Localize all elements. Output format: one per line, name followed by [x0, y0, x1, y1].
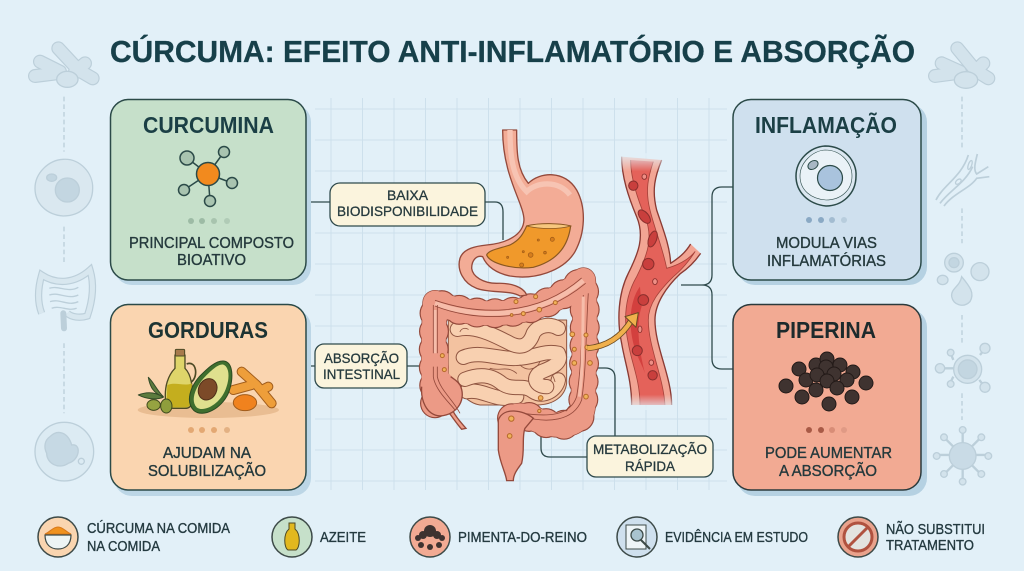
connector lines: [306, 187, 733, 457]
legend: não substitui tratamento: NÃO SUBSTITUI: [886, 521, 985, 538]
description: curcumina: PRINCIPAL COMPOSTO: [129, 235, 294, 252]
legend: cúrcuma na comida: CÚRCUMA NA COMIDA: [87, 520, 230, 537]
icon: molecule: [178, 146, 238, 206]
label: metabolização rápida: RÁPIDA: [625, 458, 676, 474]
legend: azeite: [272, 517, 366, 557]
description: piperina: PODE AUMENTAR: [765, 445, 892, 462]
left decorative icon column: [35, 48, 94, 481]
label: baixa biodisponibilidade: BAIXA: [387, 187, 429, 203]
label: metabolização rápida: [587, 436, 713, 477]
description: piperina: A ABSORÇÃO: [779, 460, 877, 480]
food particles: [440, 295, 592, 438]
legend: evidência em estudo: [617, 517, 808, 557]
label: baixa biodisponibilidade: BIODISPONIBILIDADE: [337, 203, 478, 219]
colon: [433, 278, 588, 425]
central anatomy: digestive system: [421, 130, 592, 481]
arrow into vessel: [587, 313, 638, 348]
rectum: [498, 411, 533, 481]
description: inflamação: MODULA VIAS: [776, 235, 877, 252]
description: curcumina: BIOATIVO: [177, 252, 246, 269]
icon: peppercorns: [779, 352, 873, 411]
stomach and duodenum: [459, 130, 583, 296]
heading: curcumina: CURCUMINA: [143, 112, 274, 138]
label: absorção intestinal: [315, 344, 407, 388]
legend: azeite: AZEITE: [320, 530, 366, 546]
description: gorduras: SOLUBILIZAÇÃO: [148, 460, 266, 480]
right decorative icon column: [933, 48, 992, 485]
heading: gorduras: GORDURAS: [148, 317, 268, 343]
panel: gorduras: [110, 304, 311, 496]
label: absorção intestinal: ABSORÇÃO: [324, 350, 399, 366]
description: inflamação: INFLAMATÓRIAS: [767, 251, 886, 270]
label: metabolização rápida: METABOLIZAÇÃO: [593, 441, 707, 457]
small intestine: [448, 320, 567, 405]
legend: evidência em estudo: EVIDÊNCIA EM ESTUDO: [665, 529, 808, 546]
legend: pimenta-do-reino: [410, 517, 587, 557]
panel: curcumina: [110, 100, 311, 285]
icon: oil, avocado, olives and turmeric: [138, 349, 279, 418]
title: CÚRCUMA: EFEITO ANTI-INFLAMATÓRIO E ABSORÇÃO: [110, 33, 915, 69]
legend: pimenta-do-reino: PIMENTA-DO-REINO: [458, 530, 587, 546]
blood vessel: [587, 153, 701, 410]
icon: cell: [796, 146, 856, 206]
label: baixa biodisponibilidade: [330, 183, 485, 226]
label: absorção intestinal: INTESTINAL: [323, 366, 400, 382]
cecum and appendix: [447, 407, 466, 429]
heading: inflamação: INFLAMAÇÃO: [755, 111, 897, 138]
description: gorduras: AJUDAM NA: [163, 445, 251, 462]
legend: não substitui tratamento: [838, 517, 985, 557]
legend: cúrcuma na comida: NA COMIDA: [87, 539, 160, 555]
heading: piperina: PIPERINA: [776, 317, 876, 343]
stomach contents: [487, 224, 571, 268]
legend: cúrcuma na comida: [38, 517, 230, 557]
legend: não substitui tratamento: TRATAMENTO: [886, 538, 974, 554]
panel: piperina: [733, 304, 927, 496]
panel: inflamação: [733, 100, 927, 285]
